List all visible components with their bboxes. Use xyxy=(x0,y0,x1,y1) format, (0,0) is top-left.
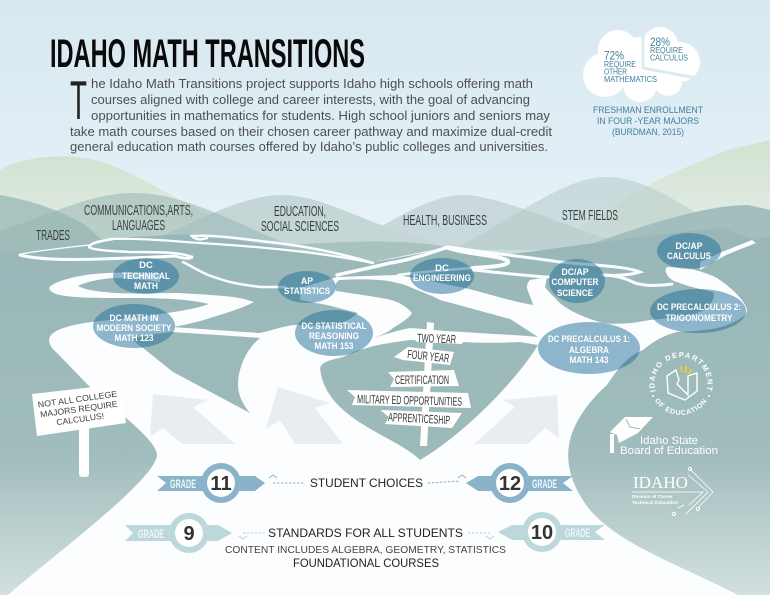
grade band text: STUDENT CHOICES xyxy=(310,476,423,490)
career field labels xyxy=(36,202,618,244)
arrows: student pathway xyxy=(150,387,559,444)
grade 10 badge: 10 xyxy=(531,522,553,544)
career field labels: COMMUNICATIONS,ARTS, xyxy=(84,202,193,219)
title: IDAHO MATH TRANSITIONS xyxy=(50,32,365,76)
career field labels: HEALTH, BUSINESS xyxy=(403,212,487,229)
callout sign: not all majors require calculus: NOT ALL COLLEGE xyxy=(37,389,118,410)
grade 9 badge xyxy=(125,513,232,553)
logo: Idaho State Board of Education: Idaho State xyxy=(640,435,698,447)
grade 11 badge xyxy=(157,463,265,503)
grade 10 badge xyxy=(498,512,605,552)
white river system xyxy=(8,267,747,595)
course labels: STATISTICS xyxy=(284,286,330,297)
course labels: TECHNICAL xyxy=(122,271,170,282)
signpost: pathway options xyxy=(347,322,471,446)
course labels: DC/AP xyxy=(562,267,589,278)
chart caption: IN FOUR -YEAR MAJORS xyxy=(597,116,699,127)
career field labels: SOCIAL SCIENCES xyxy=(261,218,339,235)
course labels: DC xyxy=(139,260,153,271)
callout sign: not all majors require calculus: CALCULUS! xyxy=(56,411,105,427)
career field labels: TRADES xyxy=(36,227,70,244)
cloud pie chart: 72% xyxy=(604,50,624,62)
course labels: DC/AP xyxy=(676,241,703,252)
course labels: ALGEBRA xyxy=(569,345,609,356)
logo: Idaho Division of Career Technical Education: Division of Career xyxy=(632,494,673,499)
logo: Idaho Department of Education: IDAHO DEPARTMENT xyxy=(649,352,713,392)
course labels: DC STATISTICAL xyxy=(302,321,367,332)
course labels: MATH 123 xyxy=(114,333,154,344)
logo: Idaho Department of Education xyxy=(649,352,713,415)
cloud pie chart: 28% xyxy=(650,37,670,49)
dotted connectors xyxy=(239,475,494,539)
intro paragraph: courses aligned with college and career interests, with the goal of advancing xyxy=(91,93,530,107)
teal valley land xyxy=(0,228,770,595)
logo: Idaho Department of Education: OF EDUCATION xyxy=(656,398,707,415)
intro paragraph: he Idaho Math Transitions project supports Idaho high schools offering math xyxy=(91,77,533,91)
cloud pie chart: REQUIRE xyxy=(650,46,683,55)
grade 9 badge: 9 xyxy=(183,523,195,545)
signpost: pathway options: CERTIFICATION xyxy=(395,373,449,387)
course labels: DC PRECALCULUS 1: xyxy=(548,334,630,345)
cloud pie chart: REQUIRE xyxy=(604,60,636,69)
chart caption: (BURDMAN, 2015) xyxy=(612,127,684,138)
grade 11 badge: 11 xyxy=(210,473,232,495)
course labels: CALCULUS xyxy=(667,251,711,262)
intro paragraph: general education math courses offered by Idaho’s public colleges and universities. xyxy=(70,140,548,154)
signpost: pathway options: TWO YEAR xyxy=(417,331,457,346)
intro paragraph xyxy=(70,69,553,154)
course labels: DC PRECALCULUS 2: xyxy=(657,302,741,313)
course labels: MATH xyxy=(134,281,158,292)
course labels: MODERN SOCIETY xyxy=(96,323,172,334)
cloud pie chart: CALCULUS xyxy=(650,54,688,62)
career field labels: EDUCATION, xyxy=(274,203,326,220)
grade 12 badge: GRADE xyxy=(532,477,557,491)
cloud pie chart: OTHER xyxy=(604,68,627,76)
course labels: REASONING xyxy=(309,331,359,342)
signpost: pathway options: FOUR YEAR xyxy=(407,347,450,365)
callout sign: not all majors require calculus: MAJORS REQUIRE xyxy=(40,399,119,419)
grade band text: CONTENT INCLUDES ALGEBRA, GEOMETRY, STATISTICS xyxy=(225,544,506,556)
course labels: AP xyxy=(301,276,314,287)
grade band text xyxy=(225,476,506,570)
intro paragraph: take math courses based on their chosen career pathway and maximize dual-credit xyxy=(70,125,553,139)
course labels: COMPUTER xyxy=(552,277,599,288)
cloud pie chart: MATHEMATICS xyxy=(604,75,657,84)
intro paragraph: opportunities in mathematics for students. High school juniors and seniors may xyxy=(91,109,551,123)
cloud pie chart xyxy=(583,26,702,102)
chart caption xyxy=(593,105,703,138)
career field labels: STEM FIELDS xyxy=(562,207,618,224)
logo: Idaho Division of Career Technical Education: IDAHO xyxy=(633,473,688,492)
course labels: DC xyxy=(435,263,449,274)
teal island: upper centre xyxy=(336,279,538,339)
teal island: centre heart with signpost xyxy=(320,340,538,460)
grade 12 badge: 12 xyxy=(499,473,521,495)
grade 11 badge: GRADE xyxy=(170,477,196,491)
course labels xyxy=(96,241,741,366)
teal island: left wedge xyxy=(132,332,260,413)
career field labels: LANGUAGES xyxy=(112,217,165,234)
course ellipses xyxy=(93,233,746,374)
river tail to the mountains xyxy=(700,240,756,270)
grade 10 badge: GRADE xyxy=(565,526,590,540)
sky background xyxy=(0,0,770,300)
grade band text: FOUNDATIONAL COURSES xyxy=(293,558,439,570)
signpost: pathway options: MILITARY ED OPPORTUNITIES xyxy=(357,392,462,409)
drop cap: T xyxy=(70,69,87,131)
mountain hills xyxy=(0,140,770,262)
chart caption: FRESHMAN ENROLLMENT xyxy=(593,105,703,116)
course labels: MATH 153 xyxy=(314,341,354,352)
course labels: ENGINEERING xyxy=(413,273,471,284)
logo: Idaho State Board of Education xyxy=(610,417,718,457)
logo: Idaho Division of Career Technical Education: Technical Education xyxy=(632,500,678,505)
grade 9 badge: GRADE xyxy=(138,527,164,541)
grade band text: STANDARDS FOR ALL STUDENTS xyxy=(268,526,463,540)
callout sign: not all majors require calculus xyxy=(32,384,126,477)
grade 12 badge xyxy=(466,463,573,503)
course labels: MATH 143 xyxy=(570,355,608,366)
course labels: SCIENCE xyxy=(557,288,593,299)
logo: Idaho Division of Career Technical Education xyxy=(632,467,713,516)
course labels: TRIGONOMETRY xyxy=(666,313,733,324)
signpost: pathway options: APPRENTICESHIP xyxy=(388,410,450,427)
thin winding river streams xyxy=(20,236,672,287)
logo: Idaho State Board of Education: Board of Education xyxy=(620,445,718,457)
course labels: DC MATH IN xyxy=(110,313,159,324)
